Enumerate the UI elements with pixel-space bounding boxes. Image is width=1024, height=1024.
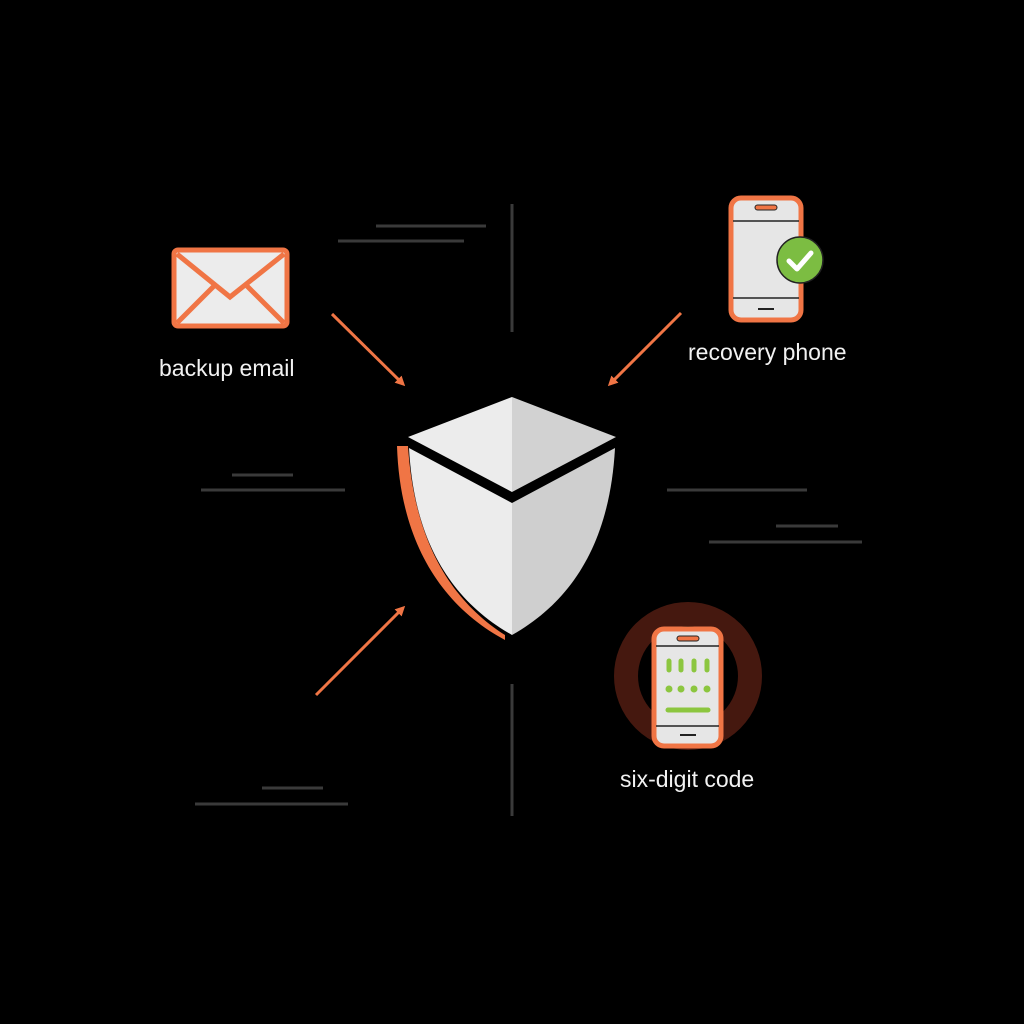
label: backup email: backup email [159,355,295,381]
icon: shield [397,397,616,640]
label: six-digit code: six-digit code [620,766,754,792]
icon: recovery phone [731,198,823,320]
arrow: email to shield [332,314,403,384]
arrow: code to shield [316,608,403,695]
arrow: phone to shield [610,313,681,384]
icon: envelope [174,250,287,326]
icon: six-digit code phone [626,614,750,746]
label: recovery phone: recovery phone [688,339,847,365]
